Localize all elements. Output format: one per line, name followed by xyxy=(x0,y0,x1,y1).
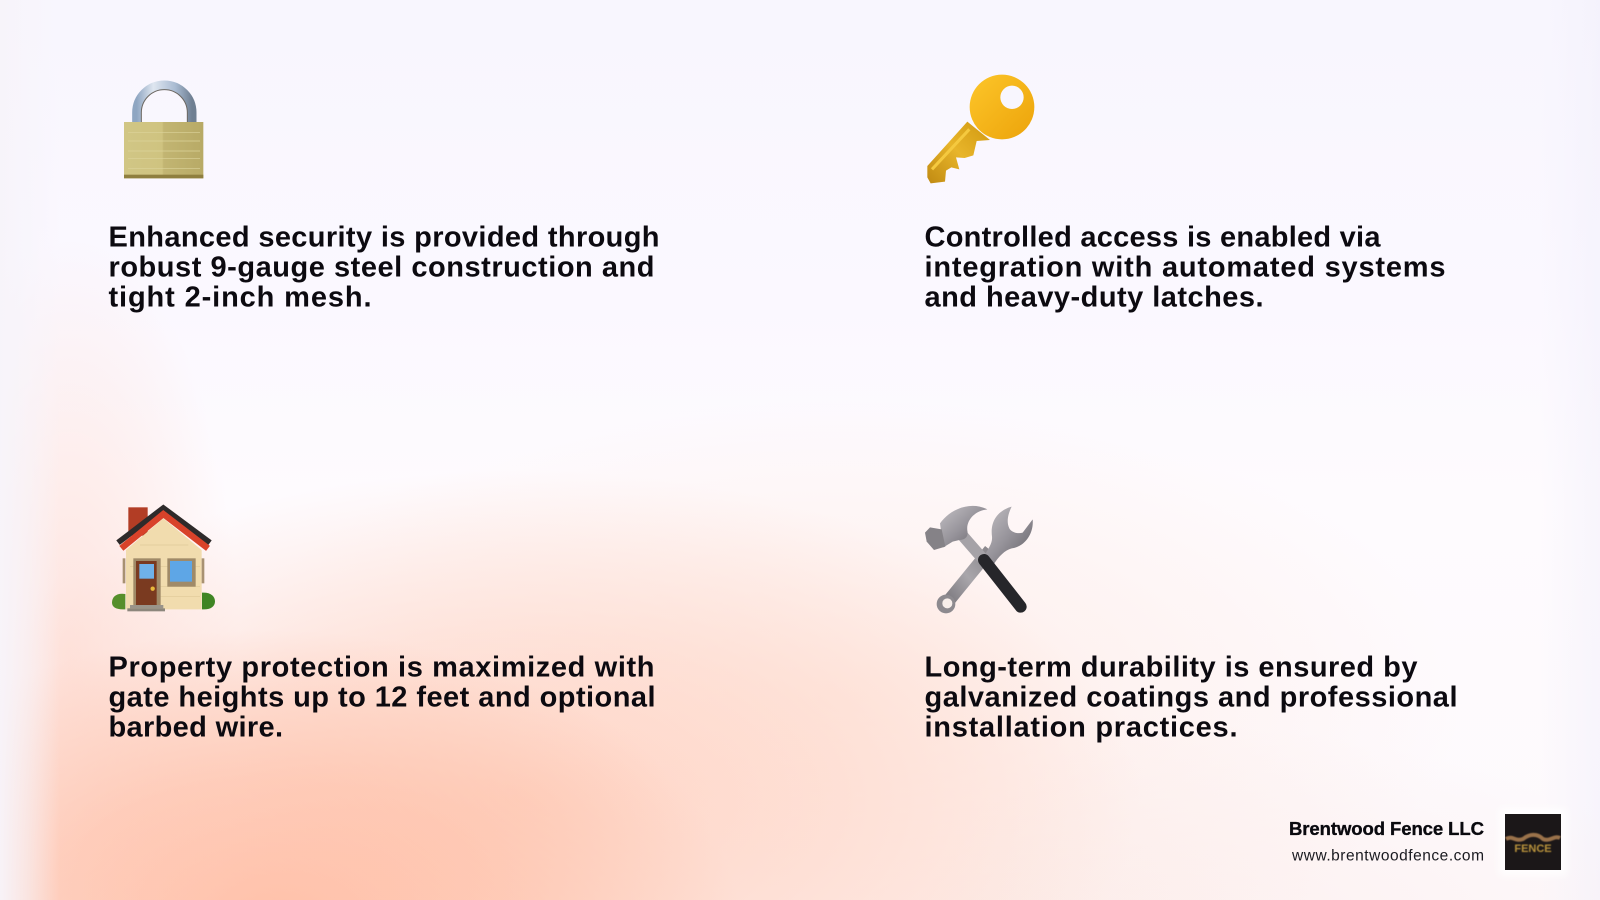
text: property: barbed wire. xyxy=(108,712,283,744)
icon: house xyxy=(112,504,215,612)
text: property: Property protection is maximized with xyxy=(108,652,654,684)
text: access xyxy=(924,222,1446,314)
panel: property protection xyxy=(108,504,656,744)
text: security: robust 9-gauge steel construction and xyxy=(108,252,654,284)
brand name and website: www.brentwoodfence.com xyxy=(1291,848,1484,864)
text: security: tight 2-inch mesh. xyxy=(108,282,372,314)
text: security xyxy=(108,222,660,314)
text: access: Controlled access is enabled via xyxy=(924,222,1381,254)
icon: hammer and wrench xyxy=(925,506,1033,614)
text: durability: installation practices. xyxy=(924,712,1238,744)
text: durability xyxy=(924,652,1458,744)
panel: enhanced security xyxy=(108,80,660,314)
text: access: and heavy-duty latches. xyxy=(924,282,1264,314)
text: durability: Long-term durability is ensured by xyxy=(924,652,1418,684)
icon: key xyxy=(927,74,1034,184)
panel: durability xyxy=(924,506,1458,744)
text: property xyxy=(108,652,656,744)
logo xyxy=(1505,814,1561,870)
text: access: integration with automated systems xyxy=(924,252,1446,284)
panel: controlled access xyxy=(924,74,1446,314)
icon: padlock xyxy=(124,80,204,178)
footer: brand block xyxy=(1289,814,1561,870)
brand name and website xyxy=(1289,818,1484,864)
text: durability: galvanized coatings and professional xyxy=(924,682,1458,714)
text: property: gate heights up to 12 feet and optional xyxy=(108,682,656,714)
brand name and website: Brentwood Fence LLC xyxy=(1289,818,1484,839)
text: security: Enhanced security is provided through xyxy=(108,222,660,254)
logo: FENCE xyxy=(1514,843,1552,855)
